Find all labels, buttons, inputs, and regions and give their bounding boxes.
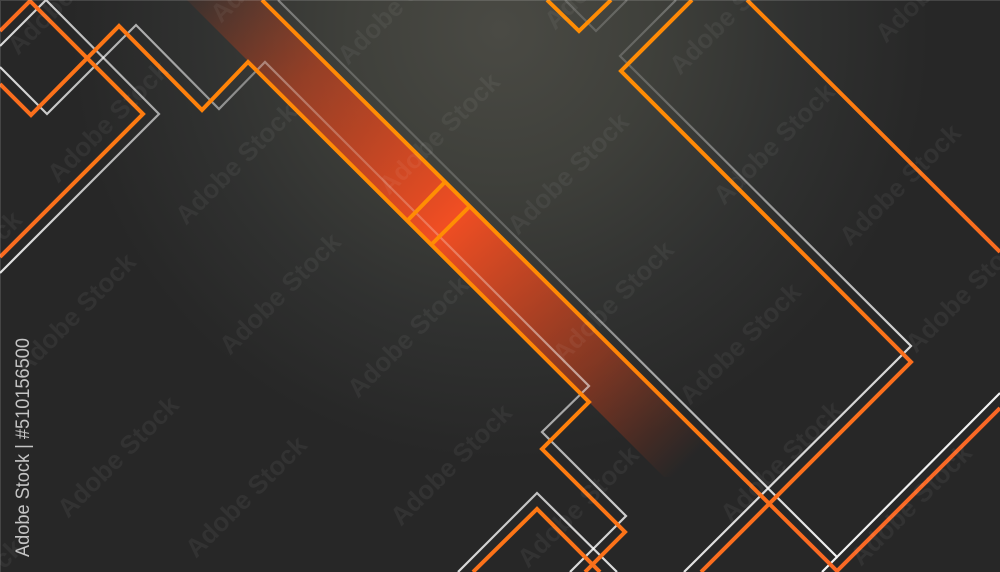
Adobe Stock watermarks: Adobe Stock (41, 54, 175, 188)
Adobe Stock watermarks: Adobe Stock (8, 246, 142, 380)
orange outline: band upper edge with right return (262, 0, 1000, 571)
orange crossbar one (408, 183, 444, 220)
grey outline: zigzag from top left to lower centre (0, 25, 626, 572)
orange outline: top-left diamond (0, 1, 143, 257)
Adobe Stock watermarks: Adobe Stock (372, 66, 506, 200)
orange outline: far right diagonal (747, 0, 1000, 252)
Adobe Stock watermarks: Adobe Stock (213, 226, 347, 360)
vertical stock id text: Adobe Stock | #510156500 (13, 338, 34, 557)
orange outline: zigzag from top left to lower centre (0, 26, 625, 572)
grey outline: short stub at bottom (822, 557, 837, 572)
Adobe Stock watermarks: Adobe Stock (341, 269, 475, 403)
grey outline: large right rectangle (620, 0, 911, 572)
grey outline: top small chevron (565, 0, 627, 31)
Adobe Stock watermarks: Adobe Stock (179, 429, 313, 563)
Adobe Stock watermarks: Adobe Stock (169, 96, 303, 230)
grey outline: top-left diamond (0, 0, 159, 273)
orange outline: bottom peak (473, 509, 600, 572)
Adobe Stock watermarks: Adobe Stock (511, 439, 645, 572)
Adobe Stock watermarks: Adobe Stock (546, 234, 680, 368)
Adobe Stock watermarks: Adobe Stock (673, 276, 807, 410)
Adobe Stock watermarks: Adobe Stock (501, 106, 635, 240)
Adobe Stock watermarks: Adobe Stock (844, 437, 978, 571)
Adobe Stock watermarks: Adobe Stock (707, 76, 841, 210)
Adobe Stock watermarks: Adobe Stock (51, 389, 185, 523)
diagonal orange band (187, 0, 740, 477)
grey outline: bottom peak (458, 493, 617, 572)
Adobe Stock watermarks: Adobe Stock (384, 397, 518, 531)
orange crossbar two (432, 207, 469, 244)
orange outline: large right rectangle (621, 0, 911, 572)
Adobe Stock watermarks: Adobe Stock (714, 394, 848, 528)
orange outline: top small chevron (547, 0, 611, 31)
Adobe Stock watermarks: Adobe Stock (833, 117, 967, 251)
grey outline: long diagonal with right return (278, 0, 1000, 557)
